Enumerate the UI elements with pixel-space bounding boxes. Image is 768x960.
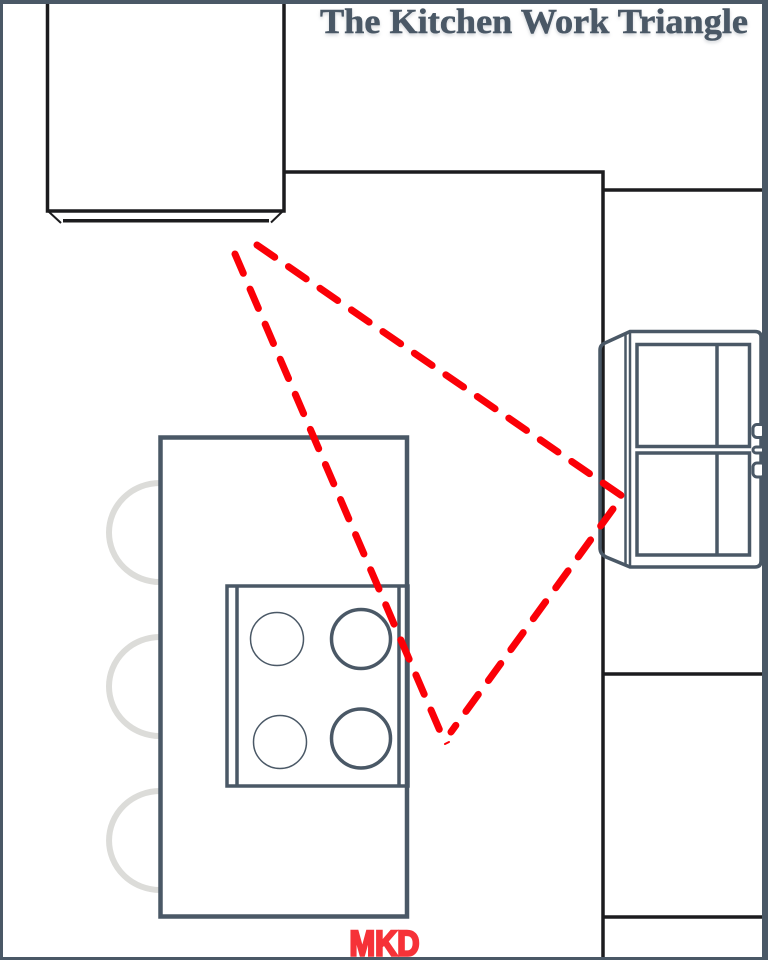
burner: bottom left xyxy=(254,716,306,768)
title: The Kitchen Work Triangle xyxy=(320,2,748,41)
left basin xyxy=(637,344,750,446)
island xyxy=(160,438,407,916)
leg: refrigerator to cooktop xyxy=(235,254,440,731)
leg: refrigerator to sink xyxy=(257,245,622,496)
leg: sink to cooktop xyxy=(451,509,613,732)
sink outer body xyxy=(600,332,761,567)
burner: bottom right xyxy=(332,709,390,768)
walls and counter lines xyxy=(285,172,763,960)
faucet xyxy=(753,424,765,477)
work triangle: dashed red lines xyxy=(235,245,622,744)
right basin xyxy=(637,453,750,555)
cooktop xyxy=(227,586,408,786)
burner: top right xyxy=(332,610,390,668)
refrigerator xyxy=(48,0,284,223)
stool 2 xyxy=(109,637,160,736)
stool 1 xyxy=(109,483,160,582)
sink xyxy=(600,332,765,567)
burner: top left xyxy=(250,612,304,666)
stools xyxy=(109,483,160,890)
stool 3 xyxy=(109,791,160,890)
